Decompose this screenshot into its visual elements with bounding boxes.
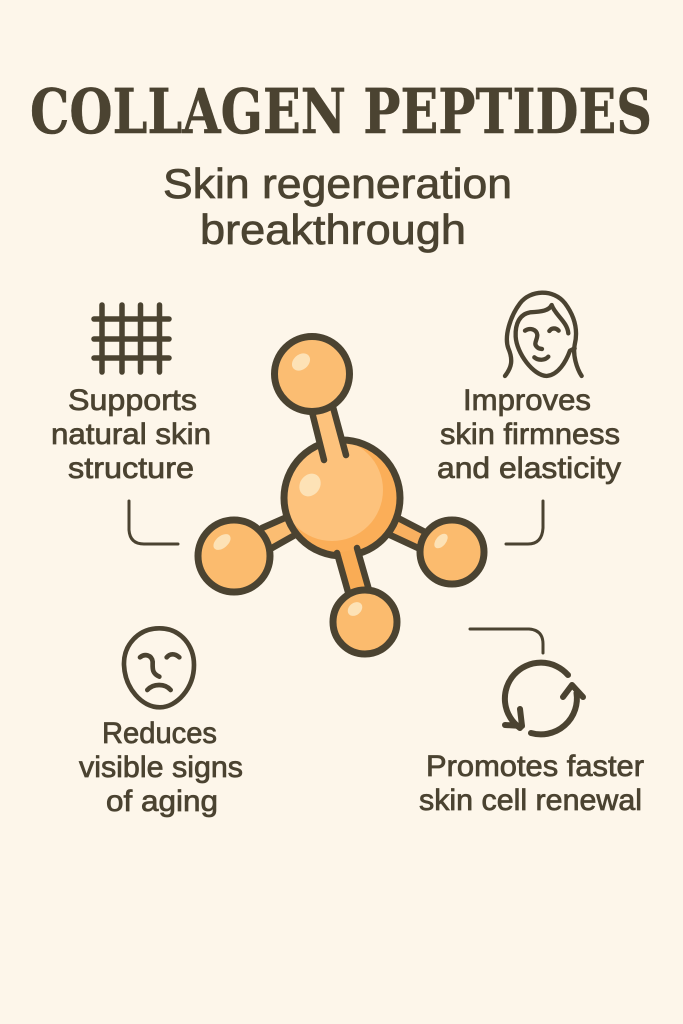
text: supports natural skin structure: natural skin bbox=[51, 418, 211, 451]
molecule: right sphere bbox=[420, 520, 484, 584]
text: supports natural skin structure bbox=[51, 384, 211, 485]
text: improves skin firmness and elasticity: Improves bbox=[463, 384, 591, 417]
text: supports natural skin structure: Supports bbox=[68, 384, 197, 417]
text: improves skin firmness and elasticity: and elasticity bbox=[437, 452, 621, 485]
subtitle: Skin regeneration bbox=[163, 160, 512, 207]
icon: sad face bbox=[124, 628, 194, 707]
connector: right bbox=[506, 501, 543, 544]
molecule: center sphere bbox=[281, 439, 400, 556]
molecule bbox=[198, 336, 484, 654]
text: promotes faster skin cell renewal: Promotes faster bbox=[426, 750, 644, 783]
text: reduces visible signs of aging bbox=[79, 717, 243, 818]
molecule: top sphere bbox=[274, 336, 350, 412]
text: improves skin firmness and elasticity bbox=[437, 384, 621, 485]
text: supports natural skin structure: structure bbox=[68, 452, 194, 485]
molecule: bottom bond bbox=[337, 548, 369, 592]
molecule: top bond bbox=[312, 407, 346, 460]
text: reduces visible signs of aging: of aging bbox=[106, 785, 218, 818]
molecule: left bond bbox=[262, 517, 295, 548]
molecule: right bond bbox=[390, 518, 425, 548]
icon: renewal cycle arrows bbox=[505, 663, 583, 734]
subtitle bbox=[163, 160, 512, 253]
text: reduces visible signs of aging: Reduces bbox=[102, 717, 217, 750]
text: reduces visible signs of aging: visible signs bbox=[79, 751, 243, 784]
infographic canvas bbox=[32, 87, 650, 818]
subtitle: breakthrough bbox=[200, 206, 466, 253]
text: promotes faster skin cell renewal bbox=[419, 750, 644, 817]
text: promotes faster skin cell renewal: skin cell renewal bbox=[419, 784, 642, 817]
molecule: left sphere bbox=[198, 520, 270, 592]
molecule: bottom sphere bbox=[333, 590, 397, 654]
icon: grid bbox=[94, 305, 169, 372]
connector: left bbox=[129, 501, 178, 544]
connector: bottom right bbox=[470, 629, 543, 653]
text: improves skin firmness and elasticity: skin firmness bbox=[440, 418, 620, 451]
icon: woman face bbox=[505, 293, 582, 376]
